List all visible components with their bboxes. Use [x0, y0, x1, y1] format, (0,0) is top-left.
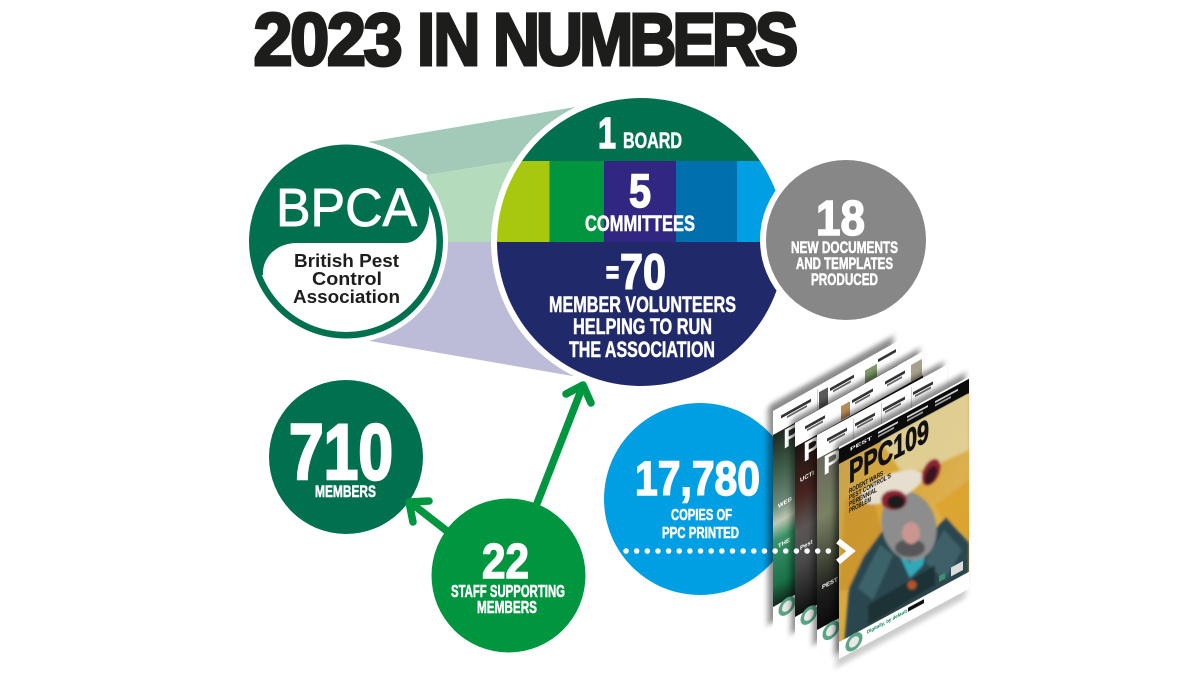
magazine 2	[791, 348, 923, 638]
committees count: COMMITTEES	[585, 211, 695, 236]
title: 2023	[254, 0, 403, 81]
cover text	[846, 386, 963, 655]
magazine 1: WEB	[778, 496, 792, 510]
arrow: staff to volunteers	[536, 385, 591, 506]
arrow: staff to members	[409, 501, 447, 531]
panel: staff stat: 22	[482, 535, 529, 589]
panel: documents stat: AND TEMPLATES	[796, 255, 893, 273]
magazine 1: P	[783, 416, 801, 456]
member volunteers count	[549, 244, 736, 362]
BPCA logo	[240, 140, 450, 345]
cover text: RODENT WARS	[849, 469, 883, 495]
connector wedges from logo to breakdown circle	[368, 107, 590, 379]
magazine 3: PEST	[822, 576, 838, 591]
member volunteers count: THE ASSOCIATION	[569, 337, 715, 362]
cover text: PERENNIAL	[849, 485, 877, 508]
BPCA logo: British Pest	[294, 251, 399, 271]
committees count: 5	[629, 164, 651, 217]
rat illustration	[839, 385, 969, 655]
BPCA logo: BPCA	[276, 178, 417, 238]
panel: PPC copies stat	[604, 403, 796, 595]
magazine front cover: PPC 109	[835, 373, 969, 668]
cover text: PROBLEM	[849, 495, 871, 515]
cover text: Digitally, by default	[867, 608, 907, 636]
panel: members stat: MEMBERS	[315, 483, 376, 501]
committees count	[585, 164, 695, 236]
panel: members stat: 710	[289, 407, 393, 496]
title: IN	[417, 0, 480, 81]
panel: structure breakdown circle	[491, 98, 776, 386]
panel: staff stat: STAFF SUPPORTING	[451, 581, 565, 601]
turquoise tie	[899, 556, 926, 579]
member volunteers count: MEMBER VOLUNTEERS	[549, 292, 736, 317]
ears	[920, 458, 942, 487]
panel: documents stat	[760, 154, 932, 326]
magazine 2: Pest	[800, 538, 813, 552]
magazine 2: UCTI	[800, 470, 814, 484]
panel: PPC copies stat: COPIES OF	[671, 507, 732, 524]
board count: 1	[598, 109, 616, 158]
board count: BOARD	[623, 128, 682, 153]
magazine 3	[813, 362, 947, 650]
panel: PPC copies stat: 17,780	[635, 453, 760, 506]
panel: PPC copies stat: PPC PRINTED	[662, 525, 739, 542]
magazine stack	[768, 336, 969, 668]
panel: members stat	[269, 380, 423, 534]
title: NUMBERS	[493, 0, 798, 81]
member volunteers count: =	[606, 256, 619, 289]
member volunteers count: HELPING TO RUN	[573, 314, 712, 339]
panel: staff stat: MEMBERS	[477, 597, 537, 617]
cover text: PEST CONTROL'S	[849, 471, 891, 502]
cover text: PEST	[850, 435, 873, 453]
board count	[598, 109, 682, 158]
title	[254, 0, 798, 81]
jacket	[843, 517, 969, 655]
BPCA logo: Control	[312, 269, 382, 289]
magazine 1	[768, 336, 898, 630]
magazine 2: P	[803, 429, 821, 469]
member volunteers count: 70	[620, 244, 666, 300]
panel: staff stat	[432, 498, 586, 652]
magazine 1: THE	[778, 536, 791, 550]
panel: documents stat: NEW DOCUMENTS	[791, 239, 898, 257]
fur	[858, 468, 924, 507]
magazine 3: P	[823, 443, 841, 482]
BPCA logo: Association	[293, 287, 400, 307]
panel: documents stat: PRODUCED	[811, 271, 878, 289]
panel: documents stat: 18	[816, 192, 865, 246]
cover text: PPC109	[849, 412, 929, 491]
head	[879, 490, 938, 562]
arrow: dotted line to magazines	[626, 541, 851, 562]
